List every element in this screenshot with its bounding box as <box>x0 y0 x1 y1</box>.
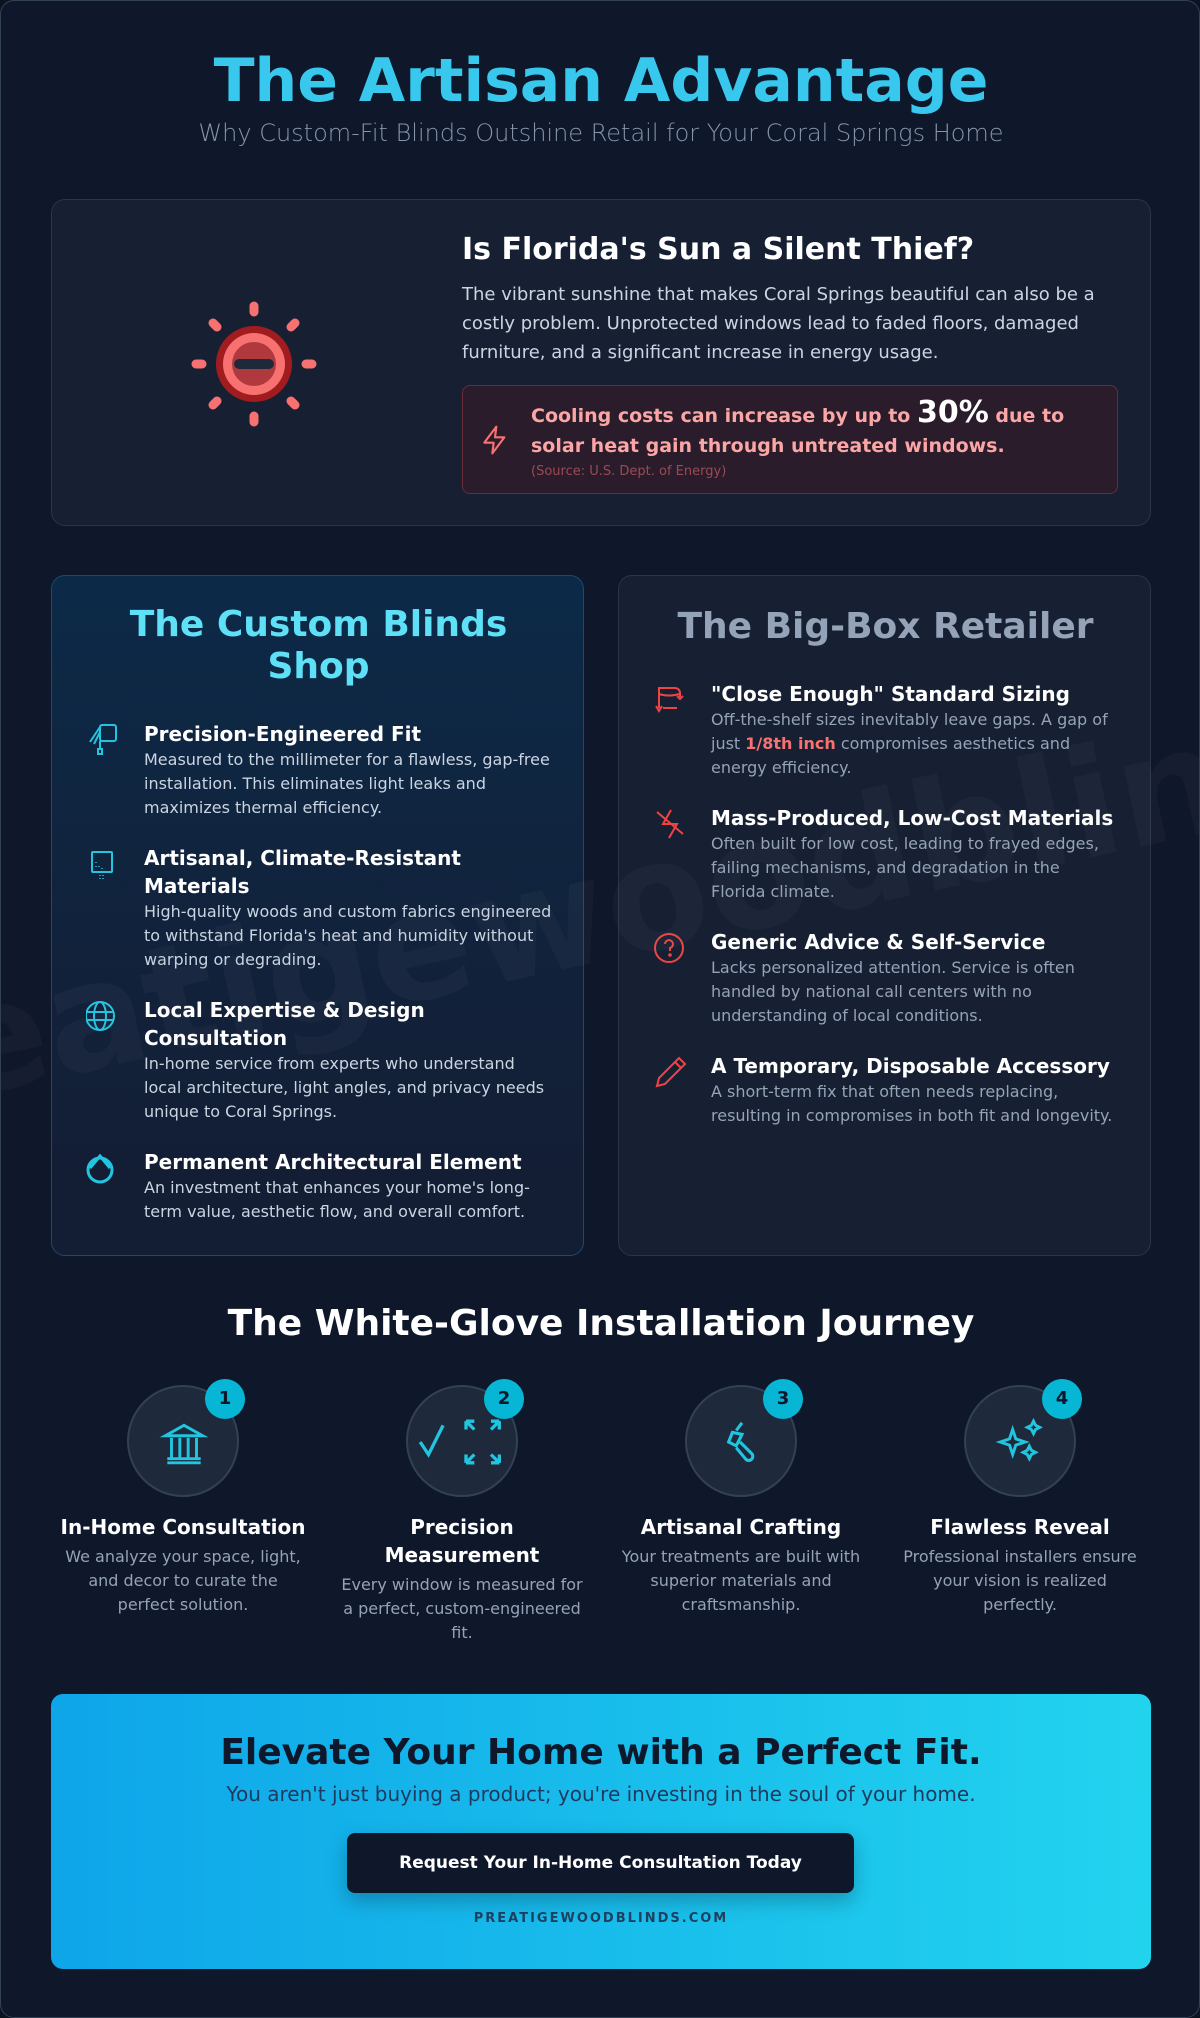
icon: building <box>127 1385 239 1497</box>
item: precision fit: Measured to the millimeter for a flawless, gap-free installation. This eliminates light leaks and maximizes thermal efficiency. <box>144 750 550 817</box>
callout <box>462 385 1118 494</box>
item: permanent element: An investment that enhances your home's long-term value, aesthetic flow, and overall comfort. <box>144 1178 530 1221</box>
domain: PREATIGEWOODBLINDS.COM <box>474 1911 728 1926</box>
icon: check and measure <box>406 1385 518 1497</box>
icon: sparkles <box>964 1385 1076 1497</box>
item: materials: High-quality woods and custom fabrics engineered to withstand Florida's heat and humidity without warping or degrading. <box>144 902 551 969</box>
item: disposable accessory: A Temporary, Disposable Accessory <box>711 1054 1110 1078</box>
step 4: 4 <box>1056 1388 1068 1409</box>
item: materials: Artisanal, Climate-Resistant Materials <box>144 846 461 898</box>
step 4: Flawless Reveal <box>930 1515 1110 1539</box>
item: local expertise: Local Expertise & Design Consultation <box>144 998 425 1050</box>
CTA subtext: You aren't just buying a product; you're investing in the soul of your home. <box>226 1782 976 1806</box>
panel: big-box retailer <box>618 575 1151 1256</box>
callout: Cooling costs can increase by up to 30% due to solar heat gain through untreated windows. <box>531 395 1064 457</box>
button: Request Your In-Home Consultation Today <box>399 1853 802 1873</box>
item: mass produced <box>656 806 1113 901</box>
text block: The vibrant sunshine that makes Coral Springs beautiful can also be a costly problem. Unprotected windows lead to faded floors, damaged furniture, and a significant increase in energy usage. <box>462 284 1095 363</box>
heading: The Custom Blinds <box>130 604 507 645</box>
step 4 <box>903 1379 1137 1614</box>
step 3: Artisanal Crafting <box>641 1515 841 1539</box>
item: local expertise: In-home service from experts who understand local architecture, light angles, and privacy needs unique to Coral Springs. <box>144 1054 544 1121</box>
panel: Florida sun <box>51 199 1151 526</box>
step 1: We analyze your space, light, and decor to curate the perfect solution. <box>65 1547 301 1614</box>
item: disposable accessory <box>656 1054 1112 1125</box>
item: standard sizing <box>655 682 1108 777</box>
item: materials <box>91 846 551 969</box>
step 3: 3 <box>777 1388 789 1409</box>
heading: journey: The White-Glove Installation Journey <box>228 1303 974 1344</box>
icon: brush <box>685 1385 797 1497</box>
icon: bolt <box>483 426 506 454</box>
step 2 <box>341 1379 583 1642</box>
heading: Is Florida's Sun a Silent Thief? <box>462 232 974 267</box>
item: permanent element <box>86 1150 530 1221</box>
item: standard sizing: "Close Enough" Standard Sizing <box>711 682 1070 706</box>
item: mass produced: Mass-Produced, Low-Cost Materials <box>711 806 1113 830</box>
item: mass produced: Often built for low cost, leading to frayed edges, failing mechanisms, and degradation in the Florida climate. <box>711 834 1099 901</box>
step 2: Precision <box>410 1515 514 1539</box>
heading: Shop <box>267 646 370 687</box>
title: The Artisan Advantage <box>214 46 988 116</box>
callout: (Source: U.S. Dept. of Energy) <box>531 464 726 479</box>
item: generic advice: Lacks personalized attention. Service is often handled by national call centers with no understanding of local conditions. <box>711 958 1075 1025</box>
item: generic advice <box>654 930 1075 1025</box>
step 1 <box>61 1379 305 1614</box>
step 1: 1 <box>219 1388 231 1409</box>
panel: custom blinds shop <box>51 575 584 1256</box>
item: standard sizing: Off-the-shelf sizes inevitably leave gaps. A gap of just 1/8th inch compromises aesthetics and energy efficiency. <box>711 710 1108 777</box>
step 2: 2 <box>498 1388 510 1409</box>
item: precision fit <box>89 722 550 817</box>
step 4: Professional installers ensure your vision is realized perfectly. <box>903 1547 1137 1614</box>
subtitle: Why Custom-Fit Blinds Outshine Retail for Your Coral Springs Home <box>198 119 1004 147</box>
CTA heading: Elevate Your Home with a Perfect Fit. <box>220 1732 982 1773</box>
item: local expertise <box>86 998 544 1121</box>
item: generic advice: Generic Advice & Self-Service <box>711 930 1045 954</box>
item: disposable accessory: A short-term fix that often needs replacing, resulting in compromises in both fit and longevity. <box>711 1082 1112 1125</box>
step 3 <box>622 1379 860 1614</box>
step 2: Every window is measured for a perfect, custom-engineered fit. <box>341 1575 583 1642</box>
item: precision fit: Precision-Engineered Fit <box>144 722 421 746</box>
icon: sun <box>192 302 316 426</box>
heading: The Big-Box Retailer <box>677 606 1094 647</box>
step 3: Your treatments are built with superior materials and craftsmanship. <box>622 1547 860 1614</box>
step 1: In-Home Consultation <box>61 1515 305 1539</box>
item: permanent element: Permanent Architectural Element <box>144 1150 522 1174</box>
panel: CTA <box>51 1694 1151 1969</box>
button <box>347 1833 854 1893</box>
step 2: Measurement <box>385 1543 539 1567</box>
heading <box>130 604 507 687</box>
